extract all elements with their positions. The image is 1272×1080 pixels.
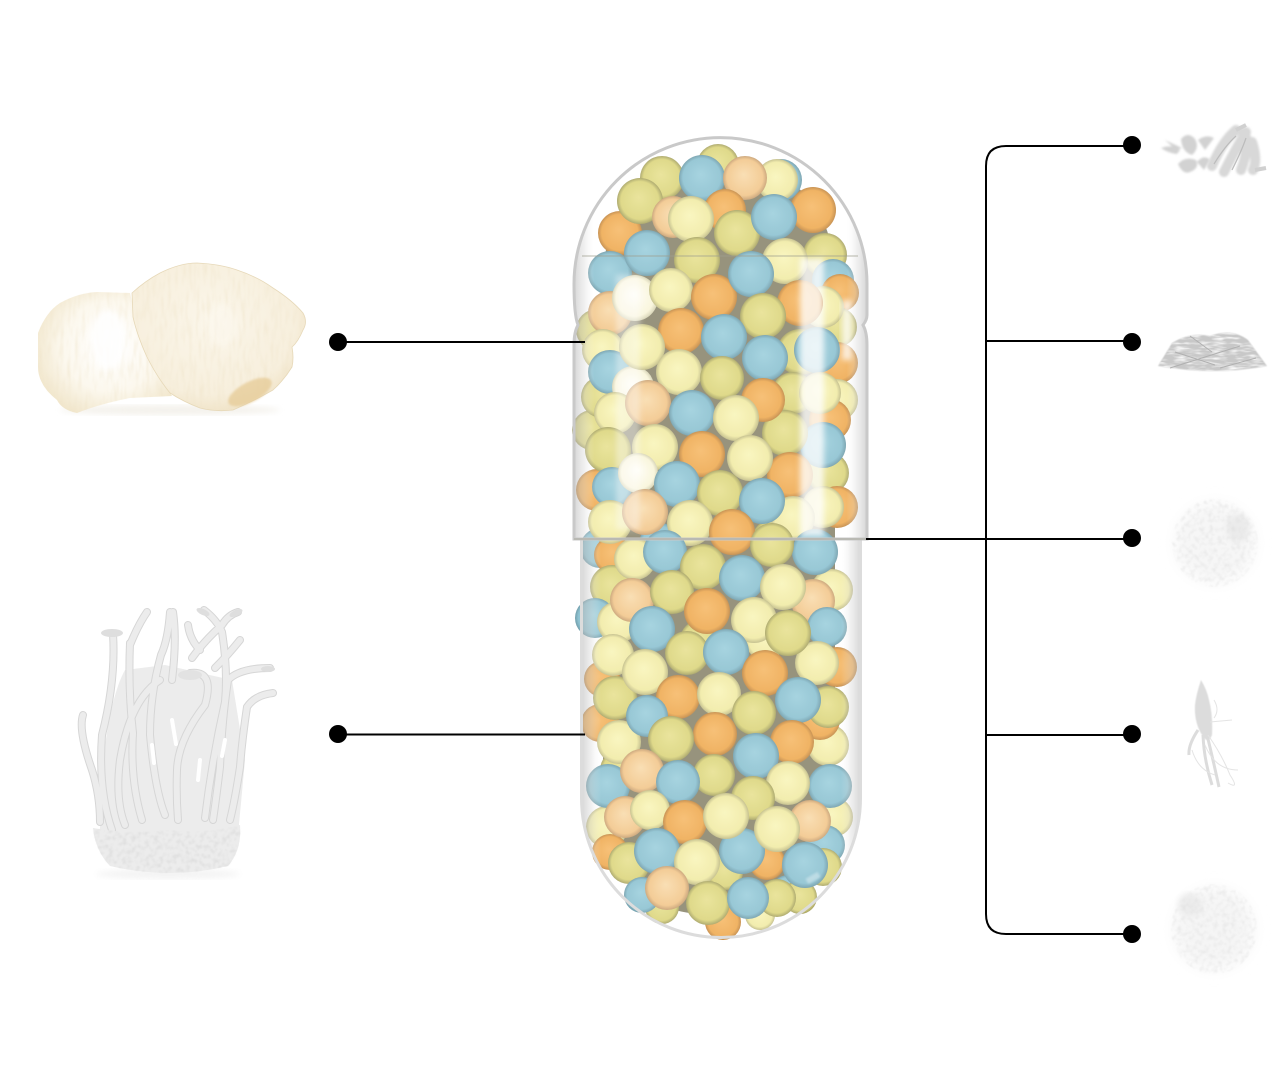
image: lion's mane mushroom — [38, 263, 306, 415]
image: shredded herb pile — [1158, 333, 1267, 371]
image: cordyceps mushroom — [82, 606, 275, 879]
image: ginseng root — [1189, 680, 1238, 787]
highlights: light strips on the upper shell — [616, 258, 852, 884]
lower shell — [582, 539, 860, 938]
panel: capsule — [572, 138, 867, 940]
shell rim — [574, 256, 867, 539]
connector: right bracket — [866, 136, 1141, 943]
connector: left bottom — [329, 725, 585, 743]
spheres: coloured beads inside the capsule — [572, 144, 859, 940]
connector: left top — [329, 333, 585, 351]
image: powder pile one — [1172, 499, 1258, 587]
capsule shadow backing — [603, 165, 835, 915]
upper shell — [574, 138, 867, 539]
image: powder pile two — [1171, 884, 1257, 974]
image: herb pods — [1161, 125, 1266, 173]
